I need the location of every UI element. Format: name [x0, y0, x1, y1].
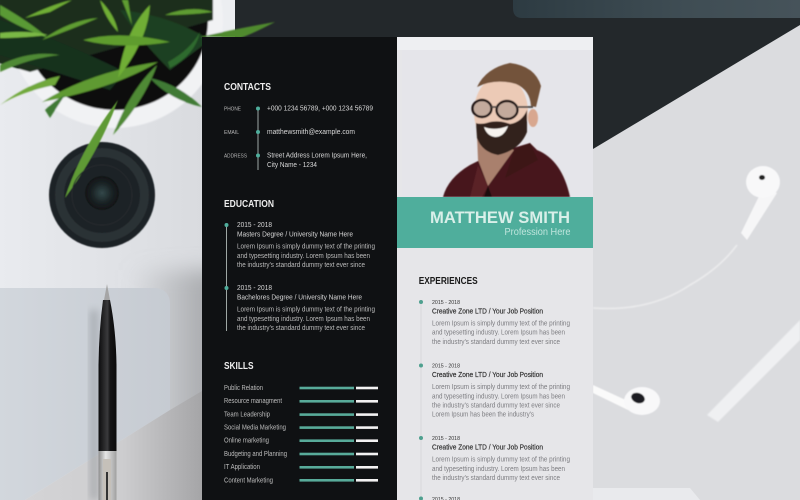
- skills chart: Public Relation: [224, 385, 263, 392]
- experience entry 1: the industry's standard dummy text ever since: [432, 339, 560, 346]
- pen: [90, 284, 116, 500]
- contact details: City Name - 1234: [267, 162, 317, 169]
- experience entry 2: Creative Zone LTD / Your Job Position: [432, 372, 543, 379]
- name band: [397, 197, 593, 248]
- contact details: ADDRESS: [224, 154, 247, 160]
- experience entry 1: 2015 - 2018: [432, 300, 460, 306]
- experience entry 1: and typesetting industry. Lorem Ipsum has been: [432, 330, 565, 337]
- earphone cord and stick: [593, 245, 800, 422]
- panel: resume left dark column: [202, 37, 397, 500]
- education entry 2: the industry's standard dummy text ever since: [237, 325, 365, 332]
- skills chart: Budgeting and Planning: [224, 451, 287, 458]
- earbud top: [741, 166, 780, 240]
- skills chart: IT Application: [224, 464, 260, 471]
- contact details: +000 1234 56789, +000 1234 56789: [267, 106, 373, 112]
- education entry 1: 2015 - 2018: [237, 222, 272, 229]
- education entry 1: Masters Degree / University Name Here: [237, 232, 353, 238]
- education timeline: [224, 223, 228, 331]
- experience entry 3: and typesetting industry. Lorem Ipsum has been: [432, 466, 565, 473]
- education entry 2: [237, 285, 375, 332]
- earbud bottom: [593, 385, 660, 415]
- experience entry 1: Lorem Ipsum is simply dummy text of the printing: [432, 320, 570, 328]
- experience entry 2: and typesetting industry. Lorem Ipsum has been: [432, 393, 565, 400]
- experience timeline: [419, 300, 423, 500]
- skills chart: Team Leadership: [224, 412, 270, 418]
- skills chart: Content Marketing: [224, 477, 273, 484]
- contacts timeline: [256, 106, 260, 170]
- contact details: [224, 106, 373, 169]
- contact details: Street Address Lorem Ipsum Here,: [267, 152, 367, 160]
- heading: skills: SKILLS: [224, 361, 254, 372]
- experience entry 3: the industry's standard dummy text ever since: [432, 475, 560, 482]
- education entry 1: the industry's standard dummy text ever since: [237, 262, 365, 269]
- education entry 1: and typesetting industry. Lorem Ipsum has been: [237, 253, 370, 260]
- education entry 1: Lorem Ipsum is simply dummy text of the printing: [237, 244, 375, 250]
- experience entry 2: Lorem Ipsum is simply dummy text of the printing: [432, 384, 570, 391]
- experience entry 2: Lorem Ipsum has been the industry's: [432, 412, 534, 419]
- camera lens: [49, 100, 155, 248]
- education entry 2: Lorem Ipsum is simply dummy text of the printing: [237, 306, 375, 314]
- skills chart: Social Media Marketing: [224, 424, 286, 432]
- experience entry 1: Creative Zone LTD / Your Job Position: [432, 308, 543, 316]
- contact details: EMAIL: [224, 130, 239, 136]
- portrait photo: [443, 63, 570, 197]
- education entry 2: and typesetting industry. Lorem Ipsum has been: [237, 316, 370, 323]
- experience entry 2: [432, 364, 570, 419]
- panel: resume right light column: [397, 37, 593, 500]
- education entry 1: [237, 222, 375, 269]
- experience entry 1: [432, 300, 570, 346]
- experience entry 3: Lorem Ipsum is simply dummy text of the printing: [432, 456, 570, 464]
- heading: contacts: CONTACTS: [224, 82, 271, 93]
- skills chart: Resource managment: [224, 398, 282, 405]
- experience entry 3: Creative Zone LTD / Your Job Position: [432, 444, 543, 452]
- heading: experiences: EXPERIENCES: [419, 276, 478, 287]
- name: MATTHEW SMITH: [430, 208, 570, 227]
- experience entry 2: 2015 - 2018: [432, 364, 460, 370]
- heading: education: EDUCATION: [224, 199, 274, 210]
- experience entry 3: 2015 - 2018: [432, 436, 460, 442]
- dark device top right: [513, 0, 800, 18]
- contact details: PHONE: [224, 106, 241, 112]
- experience entry 2: the industry's standard dummy text ever since: [432, 402, 560, 410]
- skills chart: [224, 385, 378, 484]
- profession: Profession Here: [504, 227, 571, 238]
- skills chart: Online marketing: [224, 438, 269, 445]
- contact details: matthewsmith@example.com: [267, 129, 355, 136]
- plant pot and leaves: [0, 0, 275, 135]
- experience entry 3: [432, 436, 570, 482]
- education entry 2: Bachelores Degree / University Name Here: [237, 294, 362, 302]
- education entry 2: 2015 - 2018: [237, 285, 272, 292]
